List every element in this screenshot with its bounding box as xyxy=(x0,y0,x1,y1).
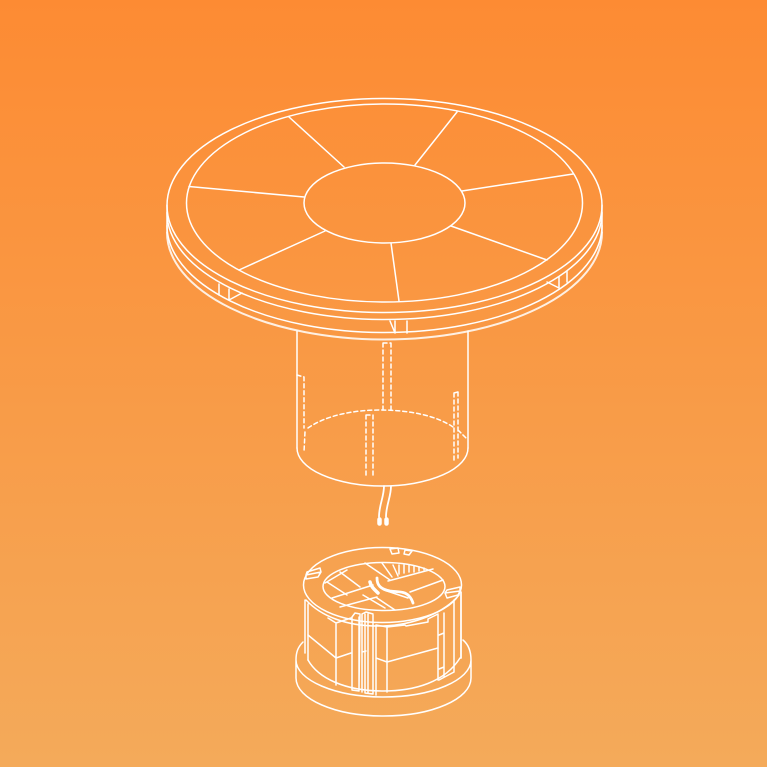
notch left xyxy=(306,568,321,579)
cable tips xyxy=(380,520,386,524)
body floor curve xyxy=(308,658,460,691)
lower rim highlight xyxy=(167,232,602,340)
ring outer xyxy=(304,548,462,622)
inner ring xyxy=(186,104,582,302)
battery cell left xyxy=(308,618,351,685)
battery base xyxy=(296,548,471,716)
cylinder walls xyxy=(297,331,468,448)
battery cell middle xyxy=(376,614,438,695)
bracket right xyxy=(547,271,567,288)
inner structure xyxy=(325,563,443,610)
centre hub xyxy=(304,163,465,243)
front pillars xyxy=(352,612,373,694)
outer rim xyxy=(167,98,602,312)
cylinder xyxy=(297,331,468,524)
cable coil xyxy=(370,582,378,593)
ring lower edge xyxy=(305,592,461,660)
cable ends xyxy=(379,486,391,517)
rim edges xyxy=(167,205,602,232)
notch right xyxy=(445,587,460,598)
hidden back edge xyxy=(308,410,453,428)
top disc xyxy=(167,98,602,340)
cable coil long xyxy=(377,578,413,603)
lower rim layers xyxy=(167,212,602,332)
inner vertical slats xyxy=(382,563,424,577)
bracket left xyxy=(219,284,242,300)
bracket front xyxy=(390,321,407,333)
ring inner xyxy=(323,562,445,610)
hidden channels xyxy=(297,343,466,478)
side pillars xyxy=(438,592,461,680)
base plate xyxy=(296,640,471,716)
cylinder bottom edge xyxy=(297,448,468,486)
spokes xyxy=(189,112,573,301)
notch top xyxy=(390,548,412,555)
